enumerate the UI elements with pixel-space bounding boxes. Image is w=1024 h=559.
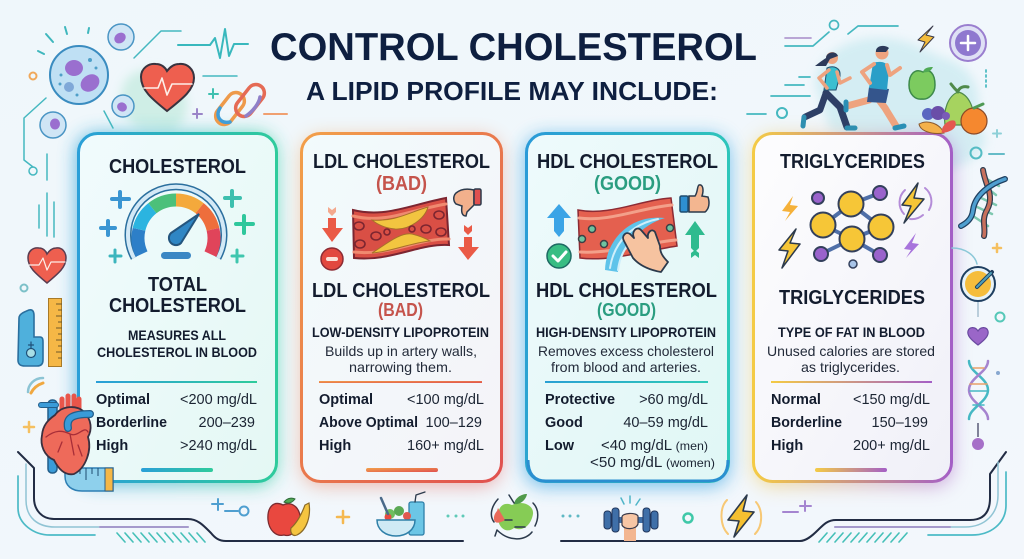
decorative bottom left lines bbox=[18, 452, 463, 542]
icon: measuring tape bbox=[65, 468, 113, 491]
icon: narrowed artery bbox=[353, 198, 449, 259]
heading: cholesterol: CHOLESTEROL bbox=[109, 156, 246, 178]
table: HDL ranges: >60 mg/dL bbox=[639, 392, 708, 408]
table: LDL ranges: <100 mg/dL bbox=[407, 392, 484, 408]
panel: HDL cholesterol bbox=[524, 134, 730, 487]
text: description: as triglycerides. bbox=[801, 359, 900, 375]
text: description bbox=[97, 327, 257, 360]
decorative circuit lines: top right bbox=[747, 20, 986, 118]
table: total cholesterol ranges: Borderline bbox=[96, 415, 167, 431]
panel: LDL cholesterol bbox=[301, 134, 502, 486]
table: HDL ranges: Protective bbox=[545, 392, 615, 408]
text: description bbox=[325, 343, 477, 375]
text: description: CHOLESTEROL IN BLOOD bbox=[97, 344, 257, 360]
table: total cholesterol ranges: 200–239 bbox=[199, 415, 255, 431]
icon: purple plus badge bbox=[950, 25, 986, 61]
icon: DNA helix large bbox=[961, 170, 1005, 236]
decorative bottom right lines bbox=[561, 452, 1006, 542]
text: description: Unused calories are stored bbox=[767, 343, 935, 359]
decorative blob: green behind heart bbox=[121, 70, 187, 130]
subtitle: A LIPID PROFILE MAY INCLUDE: bbox=[306, 76, 718, 106]
icon: lightning with arcs bbox=[721, 495, 761, 537]
panel: total cholesterol bbox=[76, 133, 276, 485]
text: fat type: TYPE OF FAT IN BLOOD bbox=[778, 324, 925, 340]
heading: triglycerides: TRIGLYCERIDES bbox=[780, 151, 925, 173]
text: description: narrowing them. bbox=[349, 359, 452, 375]
table: total cholesterol ranges: High bbox=[96, 438, 128, 454]
panel: total cholesterol: CHOLESTEROL bbox=[109, 295, 246, 317]
text: description bbox=[538, 343, 714, 375]
table: triglyceride ranges: High bbox=[771, 438, 803, 454]
icon: green apple bbox=[909, 67, 935, 99]
text: description bbox=[767, 343, 935, 375]
icon: purple pin bbox=[972, 423, 984, 450]
icon: large cell bbox=[38, 27, 108, 104]
table: triglyceride ranges: Normal bbox=[771, 392, 821, 408]
icon: dots right bbox=[562, 514, 580, 518]
decorative blob: teal behind runners bbox=[815, 38, 985, 170]
table: total cholesterol ranges: >240 mg/dL bbox=[180, 438, 257, 454]
table: HDL ranges: Low bbox=[545, 438, 575, 454]
table: triglyceride ranges: 150–199 bbox=[872, 415, 928, 431]
icon: teal ring bbox=[684, 514, 692, 522]
icons: small plus signs top left bbox=[193, 89, 218, 118]
icon: clean artery with hand bbox=[578, 198, 677, 272]
icon: gauge bbox=[128, 187, 224, 259]
heading: triglycerides repeated: TRIGLYCERIDES bbox=[779, 287, 925, 309]
text: description: Builds up in artery walls, bbox=[325, 343, 477, 359]
table: HDL ranges: 40–59 mg/dL bbox=[623, 415, 708, 431]
text: lipoprotein name: HIGH-DENSITY LIPOPROTEIN bbox=[536, 324, 716, 340]
table: triglyceride ranges bbox=[771, 392, 930, 454]
icon: ecg line bbox=[178, 29, 248, 58]
table: LDL ranges: High bbox=[319, 438, 351, 454]
icon: dots left bbox=[446, 514, 464, 518]
icon: anatomical heart bbox=[41, 396, 91, 474]
icon: small arc bbox=[28, 378, 43, 393]
table: HDL ranges: <40 mg/dL (men) bbox=[601, 438, 708, 454]
icon: chain links bbox=[212, 81, 268, 128]
icon: apple and banana bbox=[268, 498, 310, 535]
icon: plus and node connector bbox=[212, 499, 248, 516]
text: description: from blood and arteries. bbox=[551, 359, 701, 375]
icon: thumbs up bbox=[680, 185, 709, 212]
icons: lightning bolts bbox=[779, 183, 931, 268]
decorative circuit lines: top left bbox=[24, 31, 287, 237]
icon: molecule bbox=[810, 186, 894, 268]
icon: thumbs down bbox=[454, 189, 481, 216]
heading: total cholesterol: TOTAL bbox=[148, 274, 207, 296]
icon: green apple in swirl bbox=[491, 494, 538, 539]
icons: plus signs bbox=[101, 191, 253, 262]
table: triglyceride ranges: 200+ mg/dL bbox=[853, 438, 930, 454]
title: CONTROL CHOLESTEROL bbox=[270, 26, 757, 69]
icon: dumbbell with fist bbox=[604, 496, 658, 541]
icon: down arrow bbox=[458, 225, 479, 260]
table: LDL ranges: Above Optimal bbox=[319, 415, 418, 431]
icons: right side small marks bbox=[970, 130, 1004, 375]
label: bad: (BAD) bbox=[376, 173, 427, 195]
text: lipoprotein name: LOW-DENSITY LIPOPROTEIN bbox=[312, 324, 489, 340]
table: HDL ranges: <50 mg/dL (women) bbox=[590, 455, 715, 471]
table: triglyceride ranges: Borderline bbox=[771, 415, 842, 431]
icon: right gauge bbox=[952, 248, 995, 317]
icon: measuring device bbox=[18, 310, 43, 366]
icon: small ring bbox=[30, 72, 36, 80]
table: HDL ranges bbox=[545, 392, 715, 471]
label: good repeated: (GOOD) bbox=[597, 300, 656, 320]
icon: fruit pile bbox=[919, 84, 987, 134]
icon: salad bowl with drink bbox=[377, 492, 425, 536]
icon: small orange plus bbox=[337, 511, 349, 523]
icon: yellow plus bbox=[24, 422, 34, 432]
table: total cholesterol ranges: Optimal bbox=[96, 392, 150, 408]
icon: heart with pulse bbox=[141, 64, 194, 111]
table: triglyceride ranges: <150 mg/dL bbox=[853, 392, 930, 408]
table: total cholesterol ranges bbox=[96, 392, 257, 454]
heading: LDL cholesterol repeated: LDL CHOLESTEROL bbox=[312, 280, 490, 302]
table: LDL ranges: 160+ mg/dL bbox=[407, 438, 484, 454]
icon: small teal ring bbox=[20, 284, 28, 292]
icon: dash and plus bbox=[783, 501, 811, 512]
icon: green up arrow bbox=[685, 221, 705, 258]
icon: left heart with pulse bbox=[28, 248, 66, 283]
icon: runner woman bbox=[803, 52, 855, 128]
heading: HDL cholesterol repeated: HDL CHOLESTEROL bbox=[536, 280, 717, 302]
text: description: Removes excess cholesterol bbox=[538, 343, 714, 359]
icon: down arrow and minus bbox=[321, 207, 343, 270]
icon: runner man bbox=[846, 46, 904, 128]
icon: small cells bbox=[40, 24, 134, 138]
icon: lightning bolt top right bbox=[918, 26, 934, 52]
panel: triglycerides bbox=[753, 134, 953, 487]
icon: DNA helix small bbox=[969, 361, 988, 419]
icon: up arrow and check bbox=[547, 204, 571, 268]
label: good: (GOOD) bbox=[594, 173, 661, 195]
table: LDL ranges: Optimal bbox=[319, 392, 373, 408]
label: bad repeated: (BAD) bbox=[378, 300, 423, 320]
card bottom accent bbox=[528, 460, 728, 481]
table: LDL ranges bbox=[319, 392, 484, 454]
table: HDL ranges: Good bbox=[545, 415, 583, 431]
table: total cholesterol ranges: <200 mg/dL bbox=[180, 392, 257, 408]
heading: LDL cholesterol: LDL CHOLESTEROL bbox=[313, 151, 490, 173]
text: description: MEASURES ALL bbox=[128, 327, 226, 343]
icon: purple heart bbox=[968, 328, 988, 345]
heading: HDL cholesterol: HDL CHOLESTEROL bbox=[537, 151, 718, 173]
table: LDL ranges: 100–129 bbox=[426, 415, 482, 431]
icon: ruler bbox=[48, 298, 62, 366]
